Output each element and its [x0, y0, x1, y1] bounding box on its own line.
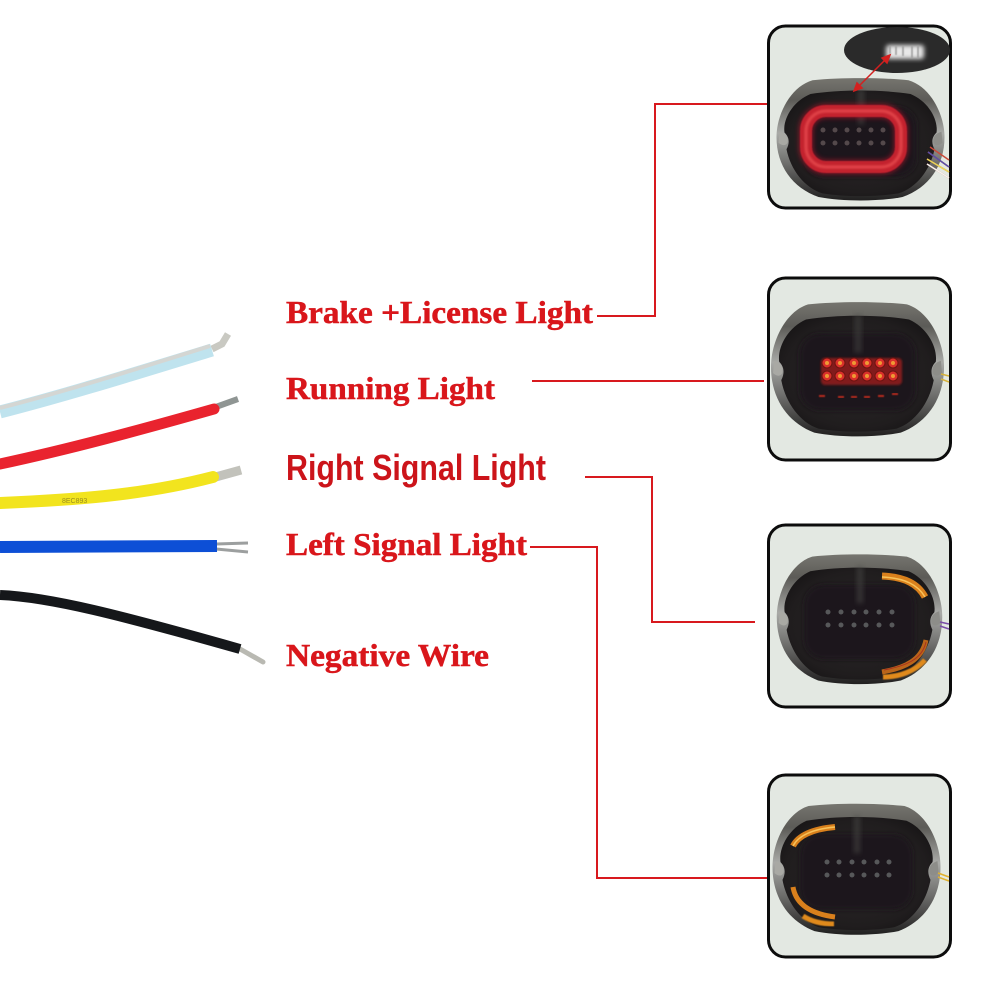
panel: running light photo — [768, 278, 950, 460]
wire: white — [0, 334, 228, 412]
connector: left signal line — [530, 547, 768, 878]
led ring — [806, 111, 901, 167]
led reflections — [819, 394, 898, 397]
panel: right signal light photo — [768, 525, 950, 707]
label: right signal light: Right Signal Light — [286, 447, 546, 488]
amber turn arcs — [793, 827, 835, 924]
wire: yellow: 8EC893 — [62, 498, 87, 505]
panel: left signal light photo — [768, 775, 950, 957]
connector: running line — [532, 380, 764, 382]
lamp wires — [938, 873, 949, 881]
led grid — [826, 610, 894, 628]
label: left signal light: Left Signal Light — [286, 526, 527, 562]
wire: blue — [0, 543, 248, 552]
amber turn arcs — [882, 576, 926, 677]
connector: right signal line — [585, 477, 755, 622]
label: running light: Running Light — [286, 370, 495, 406]
led grid — [824, 860, 892, 878]
lamp wires — [927, 147, 949, 178]
lamp wires — [940, 622, 949, 629]
led grid — [820, 128, 886, 146]
connector: brake line — [597, 104, 768, 316]
label: negative wire: Negative Wire — [286, 637, 489, 673]
lamp wires — [941, 374, 949, 382]
wire: red — [0, 399, 238, 464]
wire: yellow — [0, 470, 241, 505]
panel: brake and license light photo — [768, 26, 950, 208]
inset: license light — [844, 27, 950, 73]
led grid — [822, 358, 898, 381]
led glow — [821, 358, 902, 385]
arrow: inset pointer — [854, 55, 890, 91]
led centres — [825, 361, 895, 378]
label: brake and license light: Brake +License Light — [286, 294, 593, 330]
wire: black — [0, 595, 263, 662]
